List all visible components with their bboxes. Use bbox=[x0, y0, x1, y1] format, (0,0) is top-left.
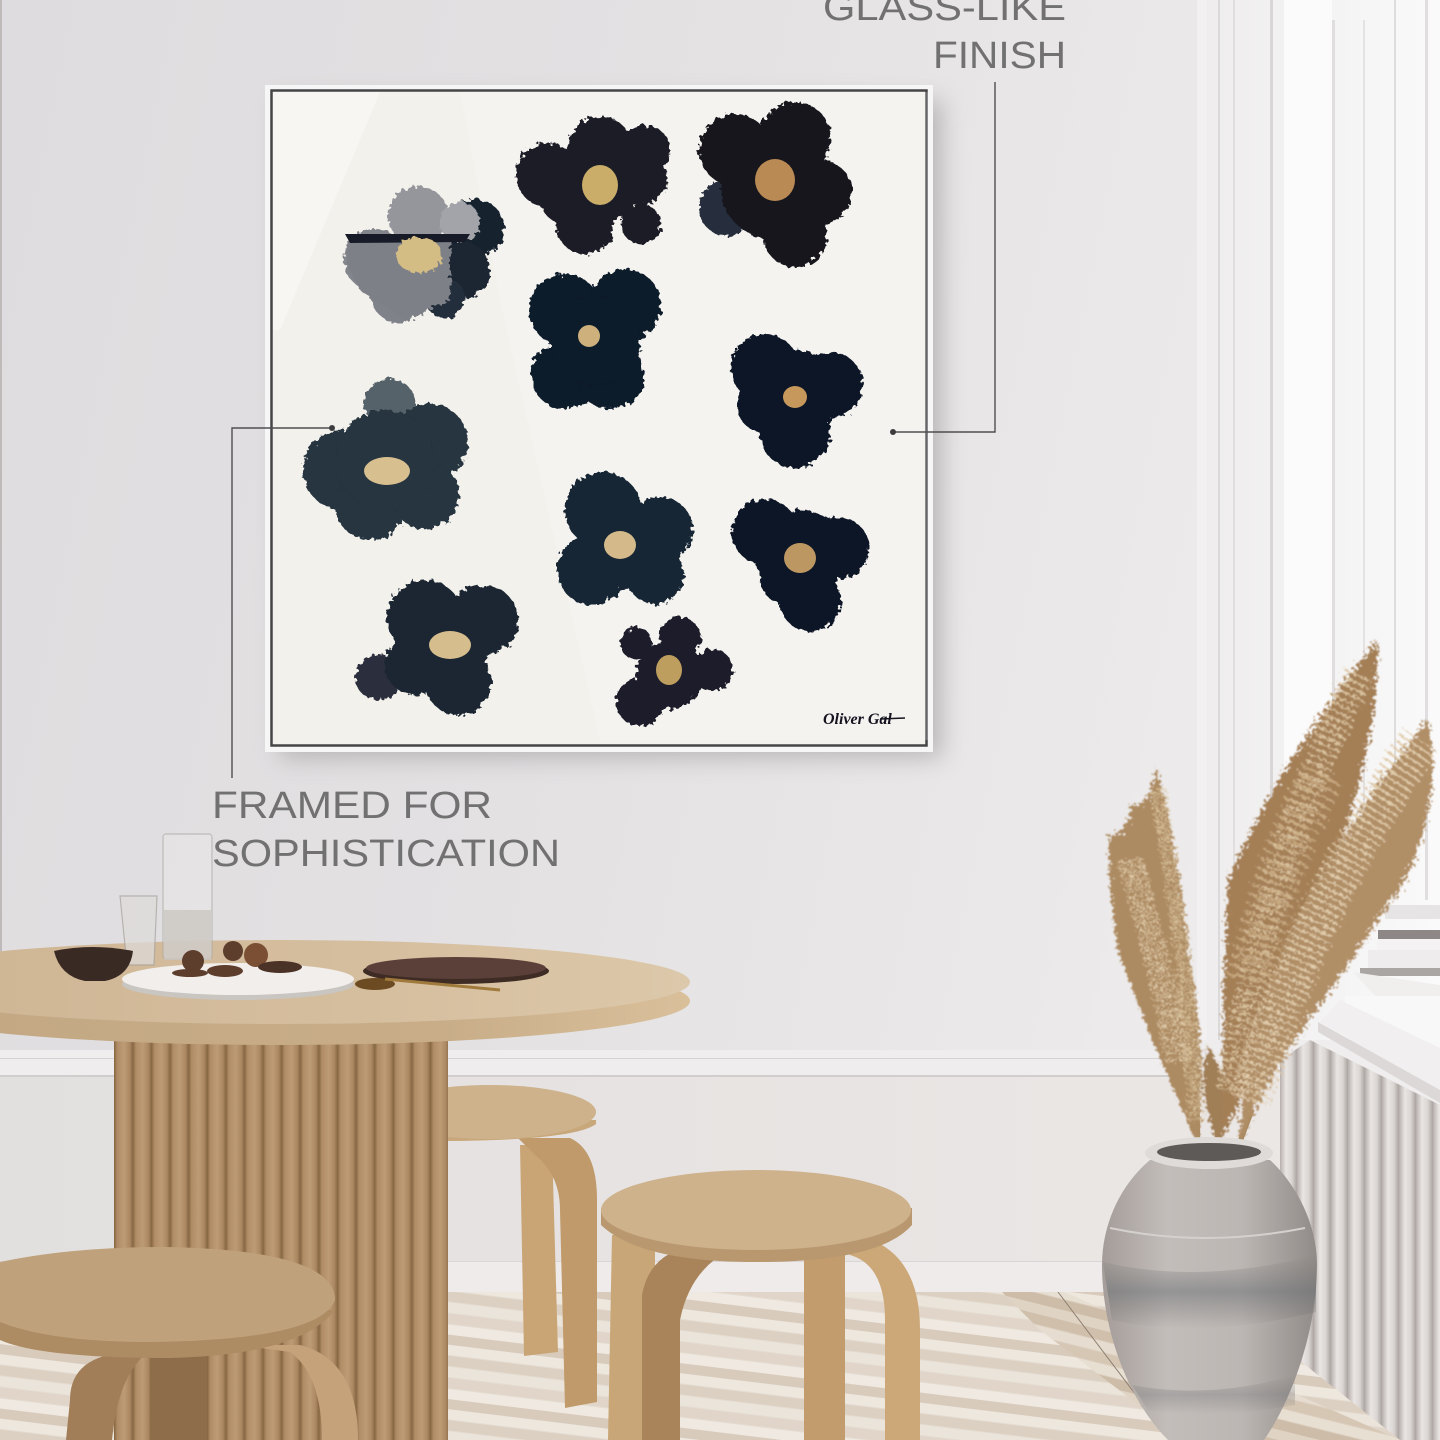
flower: top right bbox=[699, 102, 852, 267]
table top bbox=[0, 940, 690, 1045]
gold spoons bbox=[355, 978, 500, 990]
framed painting bbox=[265, 85, 933, 752]
leader line bbox=[893, 82, 995, 432]
stems bbox=[1197, 1100, 1252, 1155]
stack of books bbox=[1353, 930, 1440, 996]
carafe bbox=[163, 834, 212, 960]
gold centre bbox=[656, 655, 682, 685]
artist signature: Oliver Gal bbox=[823, 711, 892, 728]
flower: lower centre bbox=[557, 472, 693, 605]
dark inner line bbox=[272, 90, 926, 746]
flower: lower right bbox=[732, 499, 869, 631]
callout: framed for sophistication: SOPHISTICATION bbox=[212, 833, 560, 875]
window frame bbox=[1197, 0, 1440, 1040]
gold centre bbox=[755, 159, 795, 201]
gold centre bbox=[604, 531, 636, 559]
gold centre bbox=[578, 325, 600, 347]
gold centre bbox=[396, 237, 442, 273]
gold centre bbox=[364, 457, 410, 485]
plume: centre bbox=[1222, 640, 1378, 1135]
plume: right bbox=[1238, 720, 1433, 1145]
glass reflection bbox=[273, 92, 380, 330]
flower: right bbox=[731, 334, 863, 468]
nuts on plate bbox=[172, 941, 302, 977]
vase weathered bands bbox=[1103, 1255, 1316, 1328]
drinking glass bbox=[120, 896, 157, 965]
marble plate bbox=[122, 963, 354, 1000]
callout: framed for sophistication bbox=[212, 425, 560, 875]
radiator bbox=[1280, 1040, 1440, 1440]
flower: top centre bbox=[516, 116, 670, 254]
front left stool bbox=[0, 1247, 358, 1440]
flower: left teal bbox=[303, 379, 468, 540]
vase rim bbox=[1145, 1137, 1273, 1169]
front right stool bbox=[601, 1170, 920, 1440]
window sill bbox=[1318, 996, 1440, 1103]
table pedestal bbox=[114, 1030, 448, 1440]
flower: grey reflected bbox=[344, 186, 504, 323]
gold centre bbox=[783, 386, 807, 408]
gold centre bbox=[582, 165, 618, 205]
gold centre bbox=[429, 631, 471, 659]
callout heading: FRAMED FOR bbox=[212, 785, 492, 827]
leader line bbox=[232, 428, 332, 778]
callout: glass-like finish bbox=[823, 0, 1066, 435]
floor bbox=[0, 1290, 1440, 1440]
gold centre bbox=[784, 543, 816, 573]
white frame bbox=[265, 85, 933, 752]
wooden plate bbox=[363, 957, 549, 984]
back stool bbox=[384, 1085, 597, 1408]
dried pampas grass bbox=[1108, 640, 1433, 1155]
callout: glass-like finish: FINISH bbox=[933, 35, 1066, 77]
painting shadow bbox=[280, 100, 942, 758]
flower: centre bbox=[529, 269, 661, 409]
plume: left bbox=[1108, 768, 1202, 1145]
flower: bottom bbox=[616, 617, 733, 726]
dark bowl bbox=[54, 947, 133, 981]
plume: small centre bbox=[1204, 1045, 1230, 1145]
stone vase bbox=[1102, 1137, 1317, 1440]
flower: bottom left bbox=[355, 580, 518, 715]
wall moulding bbox=[0, 1050, 1200, 1292]
